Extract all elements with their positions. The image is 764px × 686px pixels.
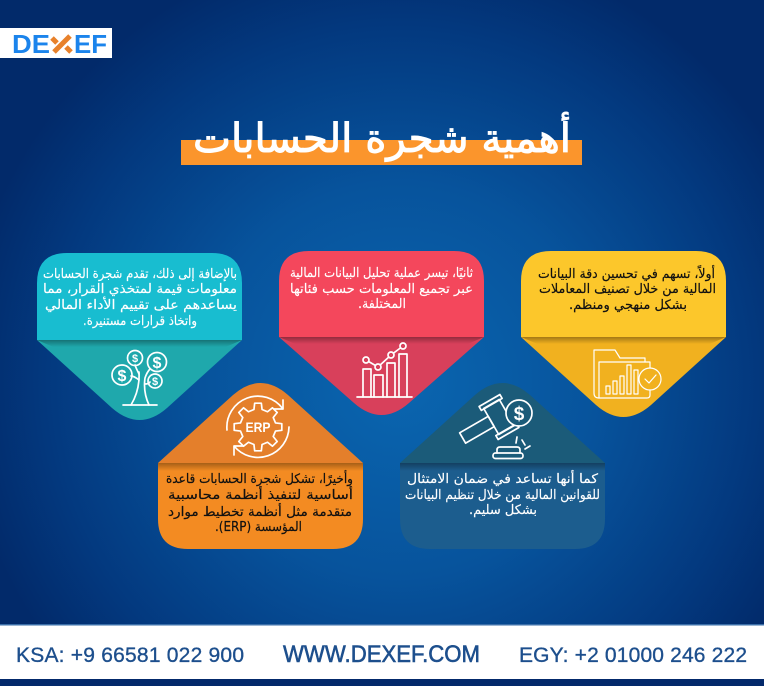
logo: DE xyxy=(12,29,50,59)
contact: EGY: EGY: +2 01000 246 222 xyxy=(519,644,747,667)
text: second point: ثانيًا، تيسر عملية تحليل البيانات المالية xyxy=(290,266,473,281)
panel: fourth (dark teal) xyxy=(400,383,605,549)
text: first point: أولاً، تسهم في تحسين دقة البيانات xyxy=(538,265,715,282)
icon: folder with chart xyxy=(594,350,661,398)
title bar xyxy=(181,140,582,165)
text: third point: يساعدهم على تقييم الأداء المالي xyxy=(45,296,237,313)
text: fourth point: للقوانين المالية من خلال تنظيم البيانات xyxy=(405,488,600,503)
title: أهمية شجرة الحسابات xyxy=(193,112,571,162)
panel: first (yellow) xyxy=(521,251,726,417)
text: third point xyxy=(43,267,237,329)
text: third point: معلومات قيمة لمتخذي القرار، مما xyxy=(43,282,237,297)
text: fourth point: بشكل سليم. xyxy=(469,503,537,518)
text: fifth point: متقدمة مثل أنظمة تخطيط موارد xyxy=(168,503,352,520)
panel: fifth (orange) xyxy=(158,383,363,549)
text: fourth point: كما أنها تساعد في ضمان الامتثال xyxy=(407,470,599,487)
text: fourth point xyxy=(405,470,600,518)
icon: money tree xyxy=(112,350,166,405)
icon: money tree: $ xyxy=(152,376,158,388)
icon: ERP gear: ERP xyxy=(246,419,270,435)
text: third point: واتخاذ قرارات مستنيرة. xyxy=(83,314,197,329)
text: fifth point: وأخيرًا، تشكل شجرة الحسابات قاعدة xyxy=(166,470,353,487)
text: third point: بالإضافة إلى ذلك، تقدم شجرة الحسابات xyxy=(43,267,237,282)
icon: gavel and coin: $ xyxy=(514,404,525,425)
panel: third (teal) xyxy=(37,253,242,420)
icon: money tree: $ xyxy=(153,355,162,372)
text: fifth point: المؤسسة (ERP). xyxy=(215,520,302,535)
text: fifth point: أساسية لتنفيذ أنظمة محاسبية xyxy=(168,486,353,503)
text: first point: المالية من خلال تصنيف المعاملات xyxy=(539,282,716,297)
icon: bar chart xyxy=(357,343,412,397)
icon: ERP gear xyxy=(227,396,289,457)
logo: EF xyxy=(74,29,107,59)
icon: money tree: $ xyxy=(132,353,138,365)
icon: money tree: $ xyxy=(118,368,127,385)
icon: gavel and coin xyxy=(453,395,532,458)
text: second point xyxy=(290,266,473,312)
footer band xyxy=(0,624,764,686)
logo xyxy=(0,28,112,59)
text: second point: عبر تجميع المعلومات حسب فئاتها xyxy=(290,282,473,297)
text: second point: المختلفة. xyxy=(358,297,406,312)
panel: second (red) xyxy=(279,251,484,415)
text: fifth point xyxy=(166,470,353,535)
contact: website: WWW.DEXEF.COM xyxy=(283,641,480,668)
contact: KSA: KSA: +9 66581 022 900 xyxy=(16,644,244,667)
text: first point: بشكل منهجي ومنظم. xyxy=(569,298,687,313)
text: first point xyxy=(538,265,716,313)
